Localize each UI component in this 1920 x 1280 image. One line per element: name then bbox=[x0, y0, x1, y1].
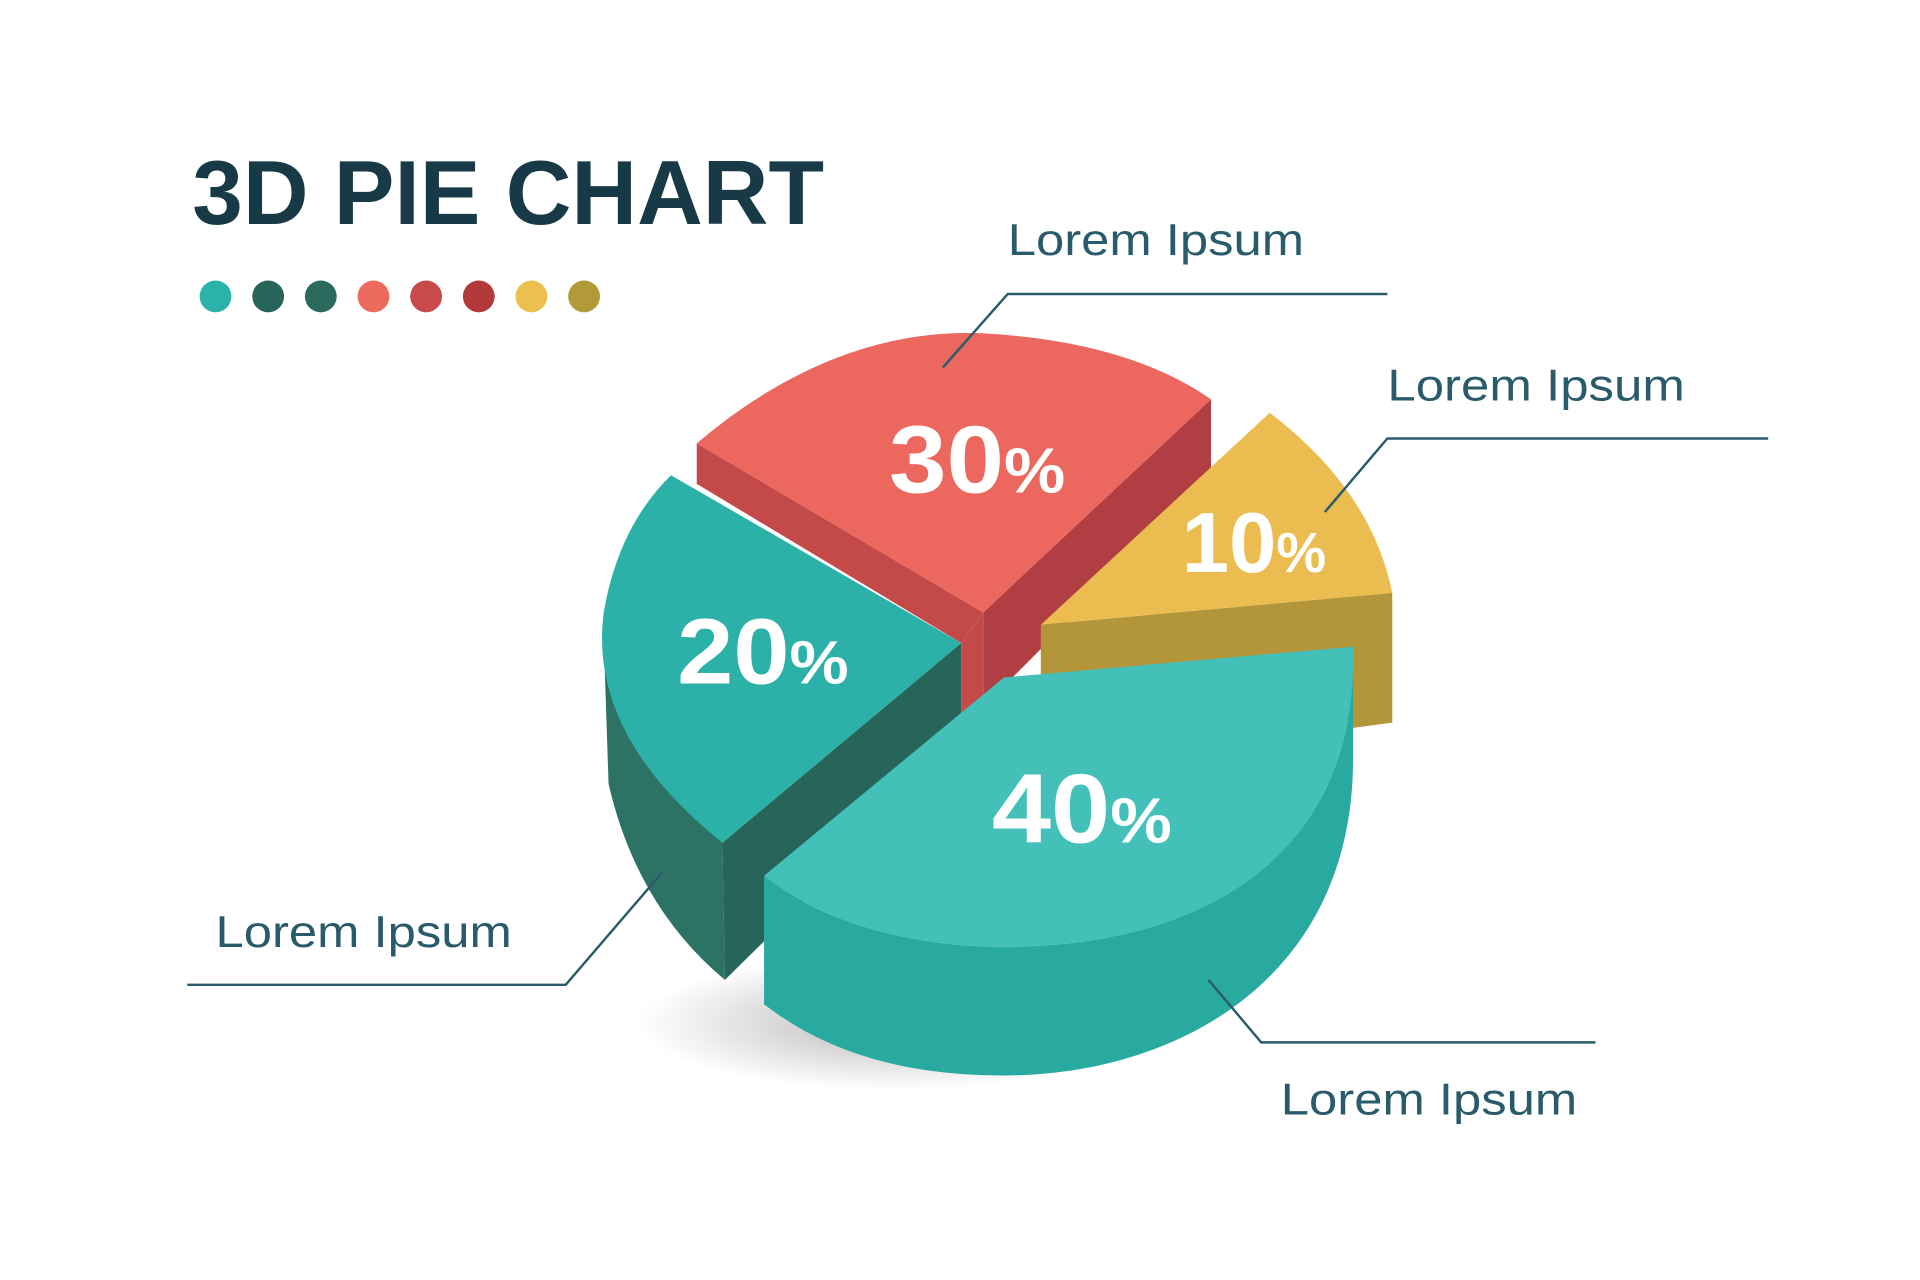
slice: 30% red: 30% bbox=[889, 407, 1065, 513]
label: top: Lorem Ipsum bbox=[1008, 216, 1304, 265]
slice: 10% yellow bbox=[1041, 413, 1392, 729]
shadow bbox=[637, 955, 1151, 1090]
label: right bbox=[1325, 362, 1768, 512]
slice: 40% teal: 40% bbox=[992, 754, 1172, 864]
label: left bbox=[187, 872, 662, 985]
slice: 10% yellow: 10% bbox=[1182, 495, 1326, 591]
label: left: Lorem Ipsum bbox=[216, 908, 512, 957]
color dots bbox=[200, 280, 600, 312]
label: top bbox=[943, 216, 1387, 367]
slice: 30% red bbox=[697, 333, 1211, 747]
label: bottom: Lorem Ipsum bbox=[1281, 1076, 1577, 1125]
title: 3D PIE CHART bbox=[192, 143, 824, 244]
label: bottom bbox=[1209, 980, 1596, 1125]
slice: 20% teal bbox=[602, 475, 961, 980]
slice: 40% teal bbox=[764, 647, 1353, 1075]
label: right: Lorem Ipsum bbox=[1387, 362, 1685, 411]
slice: 20% teal: 20% bbox=[677, 599, 849, 703]
